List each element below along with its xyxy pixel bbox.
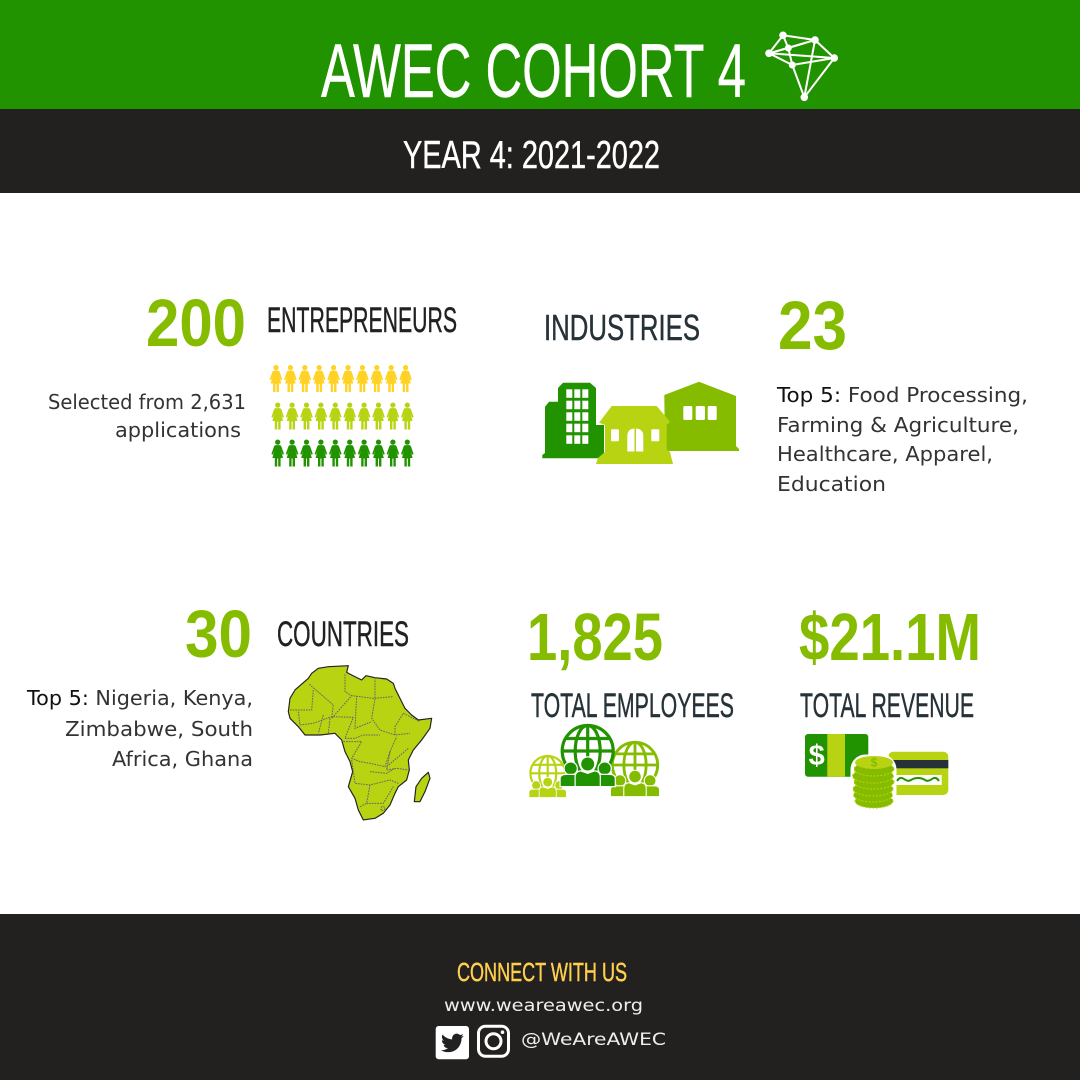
text: selected from applications — [48, 390, 246, 442]
panel: industries — [542, 287, 1028, 496]
number: 30: 30 — [185, 597, 252, 672]
text: top 5 industries — [776, 383, 1028, 496]
icon: instagram — [478, 1026, 508, 1056]
icon: money, card and coins — [805, 734, 948, 810]
heading: total employees: TOTAL EMPLOYEES — [531, 687, 734, 725]
subtitle band — [0, 109, 1080, 193]
title: AWEC COHORT 4 — [321, 29, 746, 114]
text: top 5 industries: Top 5: Food Processing, — [776, 383, 1028, 407]
icon: buildings — [542, 382, 739, 464]
panel: entrepreneurs — [48, 286, 457, 466]
panel: countries — [26, 597, 432, 820]
footer heading: CONNECT WITH US — [457, 957, 627, 987]
panel: total revenue — [799, 600, 981, 810]
text: top 5 countries: Africa, Ghana — [112, 747, 253, 771]
icon: twitter — [436, 1026, 469, 1059]
text: top 5 industries: Healthcare, Apparel, — [777, 442, 993, 466]
subtitle: YEAR 4: 2021-2022 — [403, 134, 660, 177]
text: top 5 industries: Education — [777, 472, 886, 496]
footer band — [0, 914, 1080, 1080]
map: africa — [288, 666, 432, 820]
heading: countries: COUNTRIES — [277, 615, 409, 654]
number: 200: 200 — [146, 286, 246, 361]
social handle: @WeAreAWEC — [521, 1030, 666, 1050]
header band: title — [0, 0, 1080, 114]
icon: globes and people — [529, 726, 659, 797]
panel: total employees — [527, 600, 734, 797]
heading: industries: INDUSTRIES — [544, 307, 700, 348]
icon: network — [766, 32, 838, 101]
text: top 5 countries: Zimbabwe, South — [65, 717, 253, 741]
number: $21.1M: $21.1M — [799, 600, 981, 675]
text: top 5 industries: Farming & Agriculture, — [777, 413, 1019, 437]
text: selected from applications: applications — [115, 418, 241, 442]
icon: money, card and coins: $ — [871, 756, 878, 770]
website: www.weareawec.org — [444, 996, 643, 1016]
text: top 5 countries: Top 5: Nigeria, Kenya, — [26, 686, 253, 710]
text: top 5 countries — [26, 686, 253, 771]
icon: rows of women — [270, 365, 414, 466]
heading: total revenue: TOTAL REVENUE — [800, 687, 974, 725]
heading: entrepreneurs: ENTREPRENEURS — [267, 301, 457, 340]
text: selected from applications: Selected from 2,631 — [48, 390, 246, 414]
number: 23: 23 — [778, 287, 847, 364]
number: 1,825: 1,825 — [527, 600, 663, 675]
icon: money, card and coins: $ — [809, 740, 825, 772]
